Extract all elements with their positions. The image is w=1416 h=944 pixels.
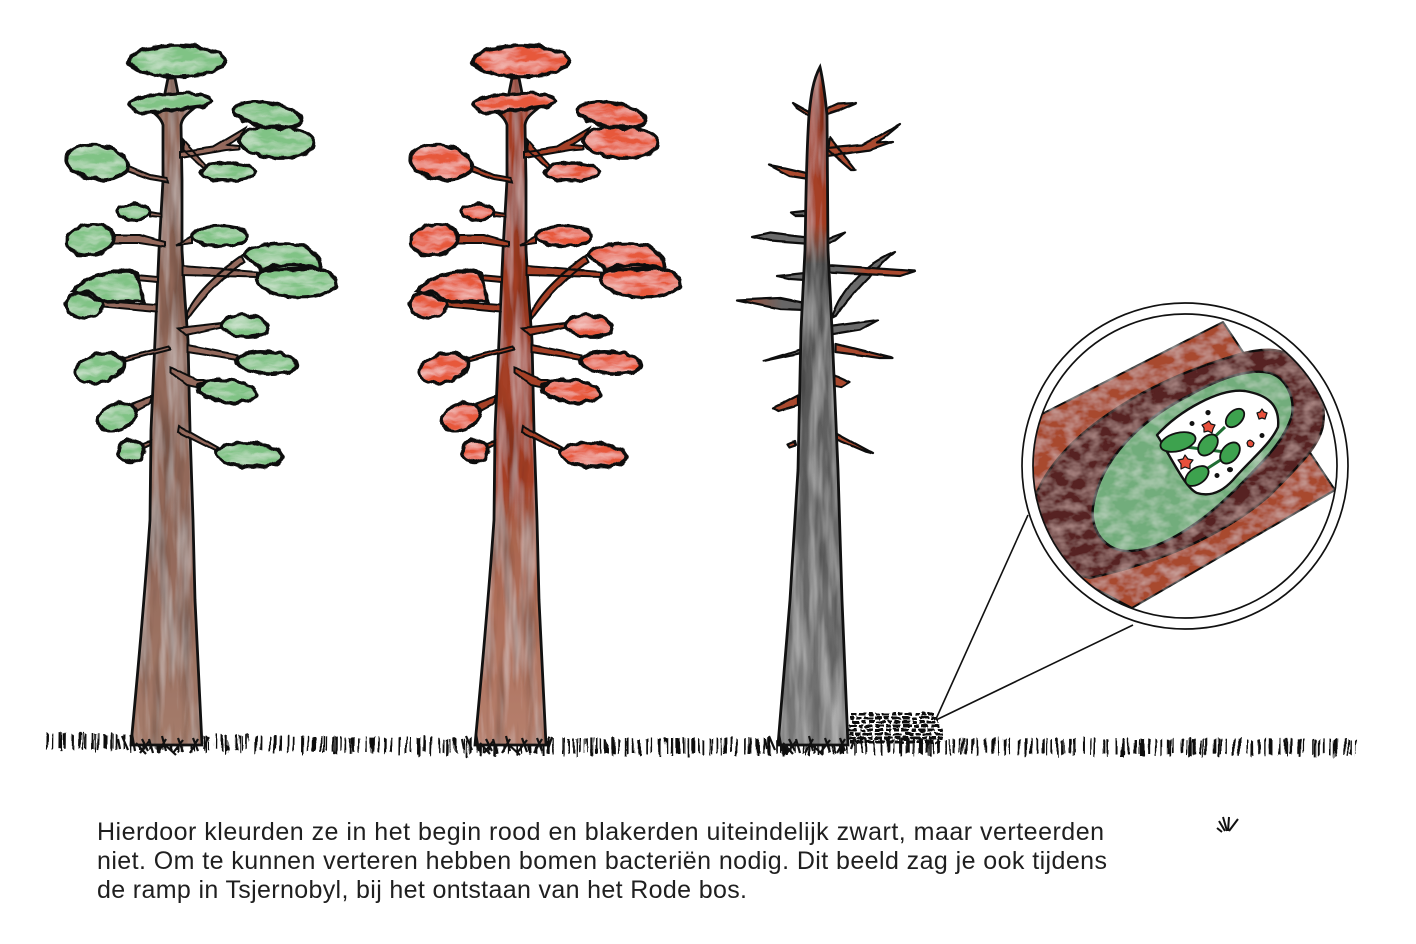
tree 2: red foliage bbox=[408, 46, 681, 755]
bacteria bbox=[1158, 405, 1248, 490]
caption text: niet. Om te kunnen verteren hebben bomen bacteriën nodig. Dit beeld zag je ook tijdens bbox=[97, 847, 1107, 875]
tree 2 foliage bbox=[408, 46, 681, 469]
magnifier pointer lines bbox=[936, 515, 1133, 720]
dark bark ring bbox=[1030, 350, 1324, 578]
tree 2 base grass bbox=[462, 734, 552, 755]
lens rings bbox=[1022, 303, 1348, 629]
caption text: Hierdoor kleurden ze in het begin rood en blakerden uiteindelijk zwart, maar verteerden bbox=[97, 818, 1104, 846]
tree 3 branches bbox=[737, 103, 915, 453]
ground grass bbox=[46, 741, 1356, 748]
outer wood band bbox=[1020, 322, 1335, 608]
tree 2 trunk bbox=[475, 78, 546, 745]
tree 2 branches bbox=[446, 128, 601, 451]
red particles and black dots bbox=[1178, 409, 1267, 478]
caption text: de ramp in Tsjernobyl, bij het ontstaan van het Rode bos. bbox=[97, 876, 747, 904]
tree 3: scorched black bbox=[737, 67, 915, 755]
debris pile bbox=[849, 714, 943, 742]
tree 1 trunk bbox=[131, 78, 202, 745]
lens contents bbox=[1020, 322, 1335, 608]
small grass tuft bbox=[1217, 817, 1238, 832]
caption text bbox=[97, 818, 1107, 904]
tree 1 base grass bbox=[118, 734, 208, 755]
tree 1: healthy green bbox=[64, 46, 337, 755]
tree 3 trunk bbox=[778, 67, 848, 745]
tree 1 branches bbox=[102, 128, 257, 451]
green tissue bbox=[1093, 372, 1293, 551]
tree 1 foliage bbox=[64, 46, 337, 469]
magnified cross-section bbox=[1020, 303, 1348, 629]
tree 3 base grass bbox=[765, 734, 855, 755]
inner cavity bbox=[1157, 391, 1278, 494]
